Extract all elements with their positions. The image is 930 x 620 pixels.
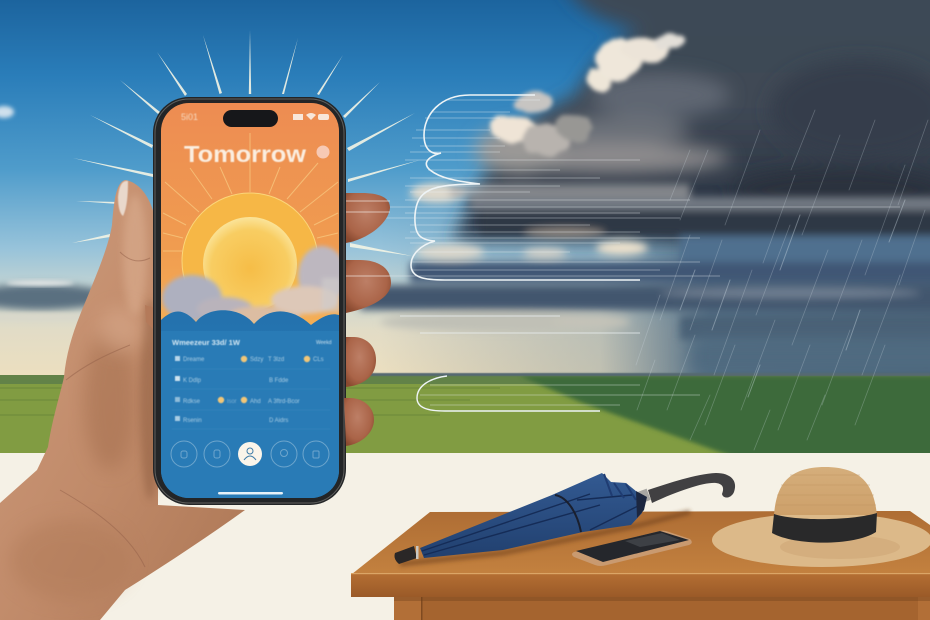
table row 3: Ahd (250, 399, 261, 405)
palm shading (10, 195, 160, 600)
storm clouds (360, 0, 930, 376)
screen sun (182, 192, 317, 308)
sunlit cloud tops (488, 32, 685, 156)
dynamic island (223, 110, 278, 127)
bottom nav buttons (171, 441, 329, 467)
table row 2 (175, 376, 289, 384)
straw hat (712, 467, 930, 567)
table row 4 (175, 416, 288, 424)
table row 2: K Ddlp (183, 378, 202, 384)
table (351, 511, 930, 620)
horizontal cloud bands (360, 183, 930, 340)
table row 1 (175, 356, 324, 363)
table row 3 (175, 397, 300, 405)
forecast table (172, 338, 332, 429)
screen sun rays (163, 133, 338, 251)
table row 1: Dreame (183, 357, 205, 363)
hand behind phone (0, 180, 245, 620)
table row 3: lsor (227, 399, 237, 405)
background: sky (0, 0, 930, 376)
table row 2: B Fdde (269, 378, 289, 384)
table row 1: T 3lzd (268, 357, 284, 363)
home indicator (218, 492, 283, 494)
status time: 5i01 (181, 112, 198, 122)
sun rays around phone (72, 30, 420, 256)
wireframe cloud outline (346, 95, 900, 411)
thumb nail (118, 181, 128, 216)
status icons (293, 113, 329, 120)
field (0, 373, 930, 473)
cream tabletop area (0, 453, 930, 620)
table row 1: Sdzy (250, 357, 263, 363)
fingers (344, 193, 391, 446)
screen clouds (162, 246, 346, 324)
phone (153, 97, 346, 505)
main storm mass (450, 0, 930, 240)
table heading: Wmeezeur 33d/ 1W (172, 338, 241, 347)
table row 3: Rdkse (183, 399, 201, 405)
small phone on table (572, 531, 692, 566)
forecast table: Weekd (316, 340, 332, 346)
table row 3: A 3ftrd-Bcor (268, 399, 300, 405)
weather badge icon (316, 146, 330, 158)
table row 4: D Aidrs (269, 418, 288, 424)
table row 1: CLs (313, 357, 324, 363)
left distant clouds (0, 106, 112, 321)
phone screen (161, 103, 346, 501)
rain streaks (636, 110, 928, 450)
title: Tomorrow (184, 141, 307, 167)
screen blue panel (161, 310, 339, 498)
table row 4: Rsenin (183, 418, 202, 424)
umbrella (394, 473, 735, 564)
